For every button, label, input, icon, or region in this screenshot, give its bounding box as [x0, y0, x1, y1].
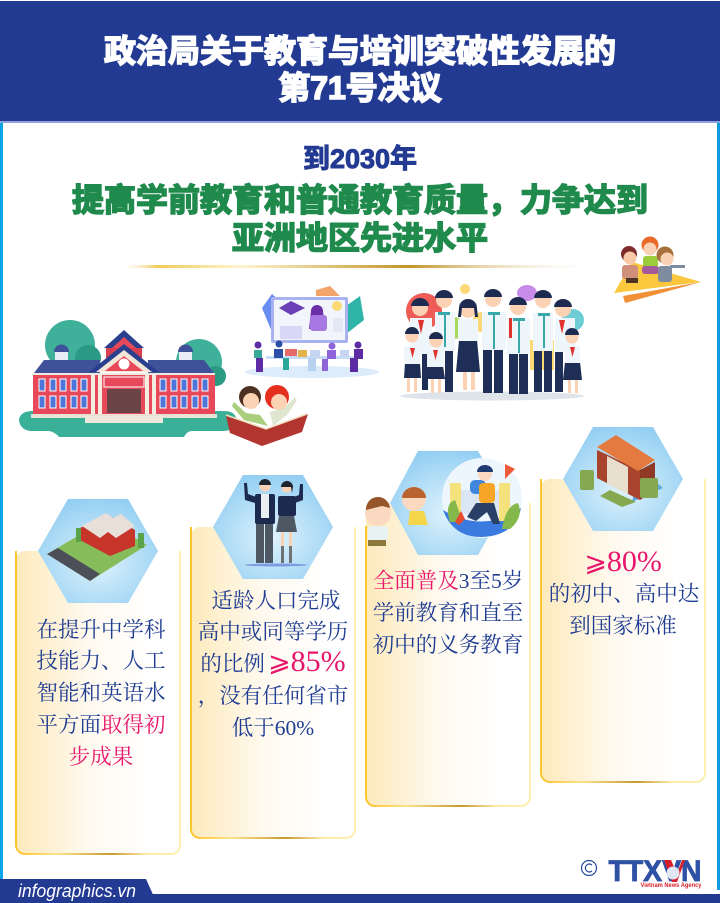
gold divider — [118, 265, 604, 268]
text: 初中的义务教育 — [373, 633, 523, 657]
heading: green goal — [72, 182, 648, 256]
panel: card 2 — [191, 475, 355, 838]
text: 的初中、高中达 — [549, 582, 700, 606]
text: ⩾80% — [584, 545, 662, 578]
title: 第71号决议 — [278, 70, 442, 106]
back row students — [410, 289, 575, 394]
footer bar — [0, 879, 720, 903]
panel: card 4 — [541, 427, 705, 782]
illustration: classroom presentation — [245, 286, 379, 378]
title: 政治局关于教育与培训突破性发展的 — [104, 33, 616, 69]
text: 低于60% — [232, 716, 314, 740]
text: 平方面取得初 — [36, 713, 166, 737]
text: 高中或同等学历 — [198, 620, 348, 644]
icon: paper plane with children — [614, 236, 701, 303]
hexagon icon: graduates — [213, 475, 333, 579]
illustration: children reading book — [226, 385, 308, 446]
heading: green goal: 亚洲地区先进水平 — [232, 220, 488, 256]
text — [36, 618, 166, 769]
panel: card 1 — [16, 499, 180, 854]
title — [104, 33, 616, 106]
subtitle: year: 到2030年 — [303, 144, 417, 174]
text: 的比例⩾85% — [200, 645, 346, 678]
text: 到国家标准 — [569, 614, 677, 638]
front row children — [404, 327, 582, 393]
text: 适龄人口完成 — [211, 589, 341, 613]
text: 技能力、人工 — [36, 649, 166, 673]
text — [549, 545, 700, 638]
text: ，没有任何省市 — [198, 684, 348, 709]
illustration: school building — [19, 320, 236, 437]
logo: TTXVN: TTXVN — [608, 855, 702, 888]
text: 步成果 — [69, 745, 133, 769]
logo: TTXVN: Vietnam News Agency — [640, 882, 702, 889]
panel: card 3 — [365, 451, 530, 806]
text: 在提升中学科 — [36, 618, 166, 642]
footer text: infographics.vn — [18, 881, 136, 901]
text: 学前教育和直至 — [373, 601, 523, 625]
illustration: group of students — [400, 284, 584, 400]
hexagon icon: children going to school — [365, 451, 522, 555]
heading: green goal: 提高学前教育和普通教育质量，力争达到 — [72, 182, 648, 218]
text — [198, 589, 348, 740]
header banner — [0, 1, 720, 123]
text — [373, 569, 523, 657]
text: 智能和英语水 — [36, 681, 166, 705]
hexagon icon: isometric school — [563, 427, 683, 531]
hexagon icon: isometric campus — [38, 499, 158, 603]
text: 全面普及3至5岁 — [373, 569, 523, 593]
